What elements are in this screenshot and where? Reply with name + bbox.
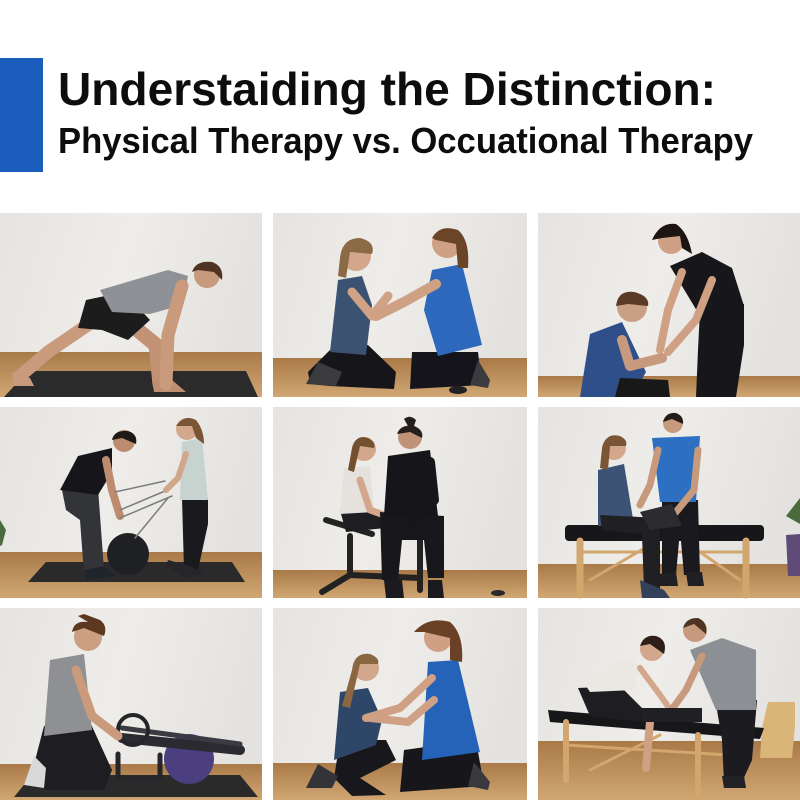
icon: small device on floor	[449, 386, 467, 394]
panel: kneeling with roller equipment	[0, 608, 262, 800]
icon: treatment table	[548, 710, 764, 798]
figure: woman holding bands	[166, 418, 208, 578]
panel: lunge exercise	[0, 213, 262, 397]
foot held on table	[642, 708, 702, 722]
figure: man in lunge	[12, 262, 222, 392]
figure: standing therapist	[640, 413, 704, 586]
panel: seated on stool	[273, 407, 527, 598]
figure: kneeling girl	[306, 654, 396, 796]
plant at edge	[786, 498, 800, 524]
icon: wooden boxes	[760, 702, 795, 758]
figure: man kneeling	[24, 614, 118, 790]
figure: therapist standing	[670, 618, 757, 788]
panel: resistance band exercise	[0, 407, 262, 598]
figure: seated patient	[340, 437, 406, 532]
icon: small object on floor	[491, 590, 505, 596]
title	[58, 63, 753, 161]
icon: treatment table	[565, 525, 764, 595]
icon: exercise apparatus	[118, 715, 240, 778]
panel: seated wrist assessment	[538, 213, 800, 397]
figure: therapist kneeling	[376, 228, 490, 389]
figure: standing therapist in black	[380, 417, 444, 598]
title: Physical Therapy vs. Occuational Therapy	[58, 120, 753, 161]
figure: woman on table	[578, 636, 672, 768]
panel: table work with two people	[538, 608, 800, 800]
figure: standing therapist	[652, 224, 744, 397]
icon: purple exercise ball	[164, 734, 214, 784]
knee brace	[640, 504, 682, 530]
figure: patient kneeling	[306, 238, 396, 389]
icon: therapy stool	[322, 520, 420, 592]
icon: plant at edge	[0, 520, 6, 546]
title: Understaiding the Distinction:	[58, 63, 716, 115]
figure: seated patient	[580, 292, 670, 397]
figure: kneeling therapist	[366, 620, 490, 792]
accent bar	[0, 58, 43, 172]
panel: kneeling arm assessment	[273, 213, 527, 397]
icon: exercise ball	[107, 533, 149, 575]
figure: seated woman	[598, 435, 670, 598]
panel: treatment table knee work	[538, 407, 800, 598]
resistance bands	[115, 481, 172, 538]
figure: man bending with bands	[60, 430, 136, 580]
panel: kneeling pair with support	[273, 608, 527, 800]
stool at edge	[786, 534, 800, 576]
